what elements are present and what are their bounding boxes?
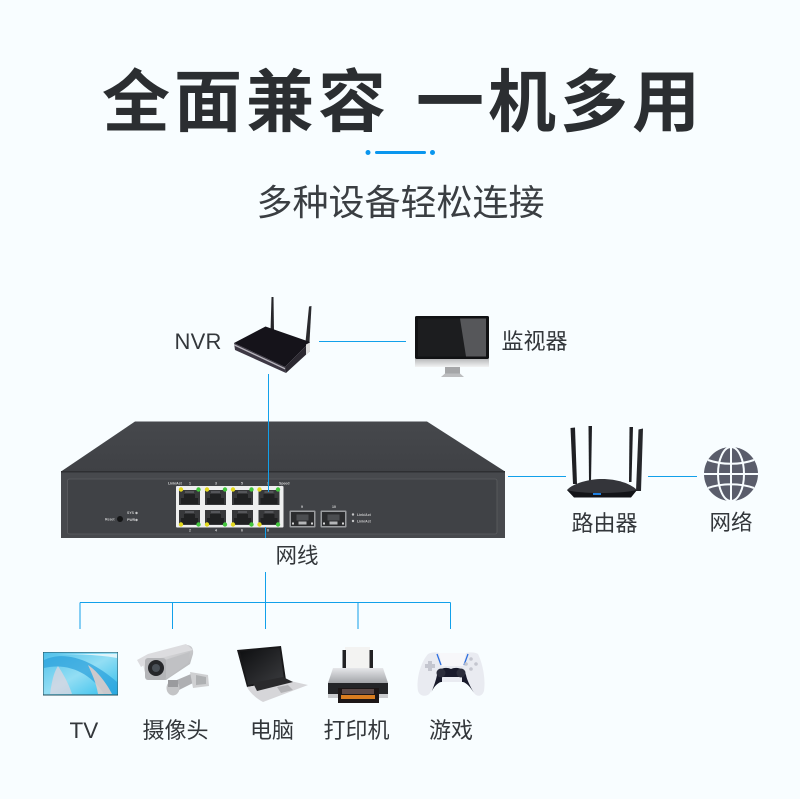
icon: NVR recorder bbox=[234, 297, 312, 373]
RJ45 port block bbox=[176, 486, 284, 528]
label: NVR: NVR bbox=[174, 329, 222, 354]
port labels: 8 bbox=[267, 528, 269, 532]
label: router: 路由器 bbox=[572, 506, 638, 538]
connection: NVR to monitor bbox=[319, 340, 406, 342]
reset and status LEDs: Reset bbox=[105, 518, 115, 522]
network switch bbox=[61, 422, 505, 538]
port labels: 3 bbox=[215, 482, 217, 486]
connection: NVR to switch port bbox=[268, 374, 270, 492]
SFP ports: Link/Act bbox=[357, 513, 372, 517]
port labels: 7 bbox=[267, 482, 269, 486]
port labels: 1 bbox=[189, 482, 191, 486]
port labels: Link/Act bbox=[168, 482, 183, 486]
reset and status LEDs: SYS bbox=[127, 511, 135, 515]
icon: printer bbox=[328, 647, 388, 703]
label: network cable: 网线 bbox=[276, 539, 319, 570]
connection: switch to router bbox=[508, 476, 566, 478]
label: monitor: 监视器 bbox=[502, 324, 568, 356]
reset and status LEDs bbox=[105, 511, 138, 522]
subtitle: 多种设备轻松连接 bbox=[256, 174, 545, 226]
port labels: 6 bbox=[241, 528, 243, 532]
icon: globe bbox=[704, 447, 758, 501]
switch front panel bbox=[61, 472, 505, 538]
icon: security camera bbox=[137, 644, 209, 696]
label: TV: TV bbox=[70, 718, 98, 743]
icon: monitor bbox=[415, 316, 489, 377]
title: 全面兼容 bbox=[102, 47, 390, 146]
connection: router to internet bbox=[648, 476, 697, 478]
label: internet: 网络 bbox=[710, 506, 753, 537]
label: laptop: 电脑 bbox=[250, 713, 294, 745]
title bbox=[102, 47, 704, 146]
SFP ports: Link/Act bbox=[357, 520, 372, 524]
port labels: 2 bbox=[189, 528, 191, 532]
label: camera: 摄像头 bbox=[142, 713, 209, 745]
label: games: 游戏 bbox=[429, 713, 473, 745]
connection tree: switch to devices bbox=[80, 527, 450, 629]
icon: game controller bbox=[418, 652, 485, 696]
SFP ports bbox=[290, 510, 372, 528]
title underline accent bbox=[366, 150, 435, 155]
port labels: 4 bbox=[215, 528, 217, 532]
icon: TV bbox=[43, 652, 118, 696]
reset and status LEDs: PWR bbox=[127, 518, 136, 522]
icon: router bbox=[567, 426, 643, 498]
port labels: Speed bbox=[279, 482, 290, 486]
port labels: 9 bbox=[301, 505, 303, 509]
switch top cover bbox=[61, 422, 505, 472]
label: printer: 打印机 bbox=[324, 713, 390, 745]
icon: laptop bbox=[237, 646, 308, 702]
port labels bbox=[168, 482, 336, 532]
title: 一机多用 bbox=[416, 47, 704, 146]
port labels: 10 bbox=[332, 505, 336, 509]
port labels: 5 bbox=[241, 482, 243, 486]
